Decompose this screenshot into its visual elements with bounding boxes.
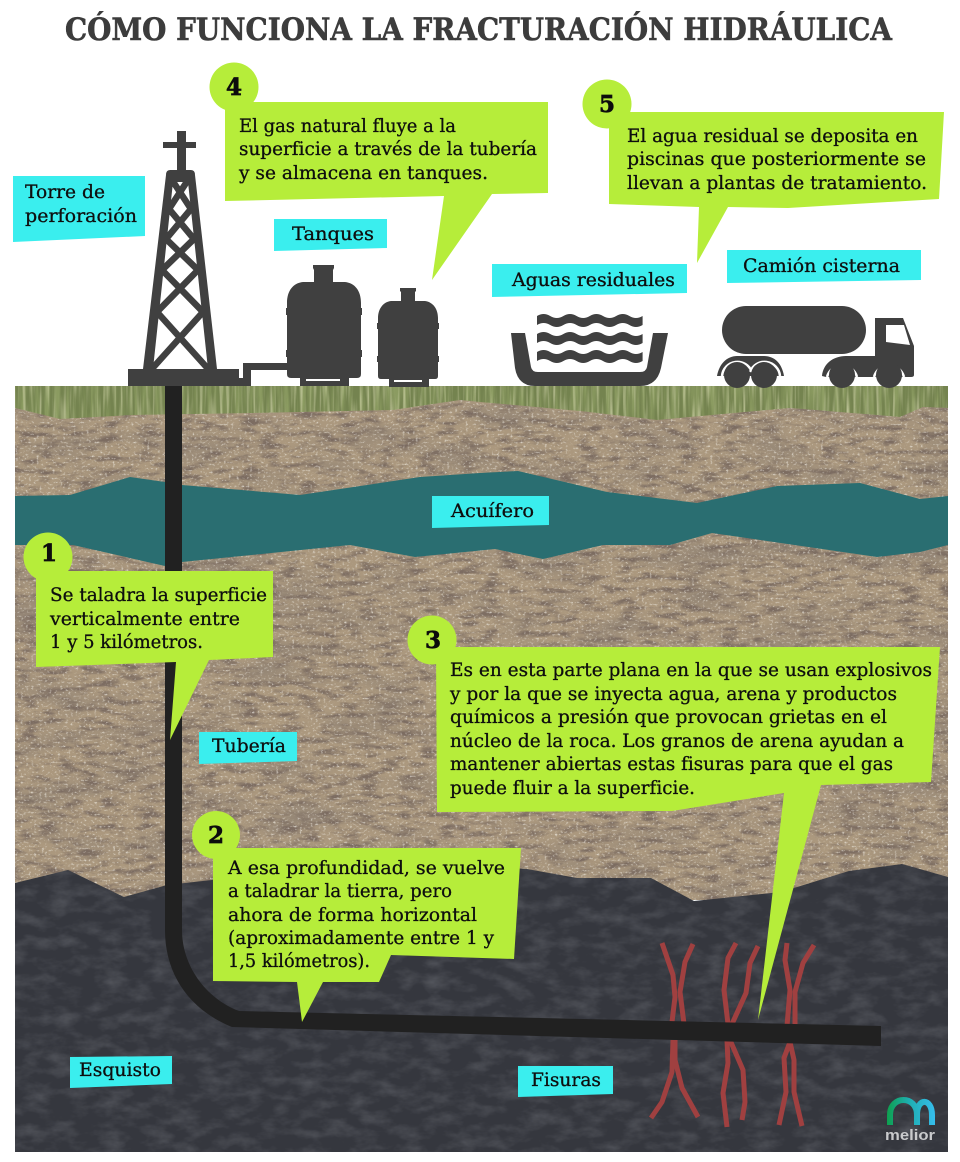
callout 5: 5 xyxy=(599,91,615,118)
callout 1: 1 xyxy=(41,540,57,567)
callout 3: núcleo de la roca. Los granos de arena ayudan a xyxy=(450,730,904,752)
label: shale xyxy=(70,1056,172,1088)
callout 4: y se almacena en tanques. xyxy=(238,162,488,184)
callout 2: A esa profundidad, se vuelve xyxy=(227,857,505,879)
label: tanks: Tanques xyxy=(292,223,374,245)
callout 2: 1,5 kilómetros). xyxy=(228,950,370,972)
panel: underground cross-section xyxy=(15,386,948,1152)
callout 3: químicos a presión que provocan grietas en el xyxy=(450,706,887,728)
callout 3: puede fluir a la superficie. xyxy=(450,777,695,799)
label: drilling tower: perforación xyxy=(25,205,137,227)
drill pipe xyxy=(165,386,881,1046)
icon: small tank xyxy=(377,288,439,387)
label: pipe xyxy=(199,732,297,764)
callout 5: piscinas que posteriormente se xyxy=(627,148,926,170)
callout 1: verticalmente entre xyxy=(49,608,240,630)
label: aquifer xyxy=(432,496,549,528)
label: fissures xyxy=(518,1066,613,1097)
fissures xyxy=(651,943,814,1127)
callout 1: 1 y 5 kilómetros. xyxy=(50,631,203,653)
shale layer xyxy=(15,860,948,1152)
label: drilling tower xyxy=(13,176,145,242)
callout 4: El gas natural fluye a la xyxy=(239,115,456,137)
callout 2: 2 xyxy=(208,822,224,849)
callout 5: llevan a plantas de tratamiento. xyxy=(627,172,927,194)
callout 3: 3 xyxy=(425,627,441,654)
icon: wastewater pool xyxy=(511,314,668,386)
label: tanker truck xyxy=(727,250,921,283)
icon: drilling tower xyxy=(128,131,239,386)
callout 4: 4 xyxy=(226,74,242,101)
callout 1 xyxy=(24,532,273,740)
grass layer xyxy=(15,386,948,420)
callout 5 xyxy=(582,80,944,263)
label: drilling tower: Torre de xyxy=(25,181,105,203)
callout 5: El agua residual se deposita en xyxy=(627,125,918,147)
icon: tanker truck xyxy=(717,306,914,388)
label: wastewater: Aguas residuales xyxy=(511,269,675,291)
label: aquifer: Acuífero xyxy=(450,500,534,522)
label: tanker truck: Camión cisterna xyxy=(743,255,900,277)
callout 4 xyxy=(210,62,548,280)
label: tanks xyxy=(274,219,387,251)
label: shale: Esquisto xyxy=(79,1059,161,1081)
callout 3: Es en esta parte plana en la que se usan explosivos xyxy=(450,659,932,681)
label: pipe: Tubería xyxy=(212,735,286,757)
callout 2: ahora de forma horizontal xyxy=(228,904,477,926)
callout 4: superficie a través de la tubería xyxy=(239,138,537,160)
label: fissures: Fisuras xyxy=(531,1069,601,1091)
title: CÓMO FUNCIONA LA FRACTURACIÓN HIDRÁULICA xyxy=(65,10,893,48)
callout 2 xyxy=(192,811,521,1022)
soil layer xyxy=(15,396,948,906)
callout 3 xyxy=(408,616,940,1020)
callout 3: mantener abiertas estas fisuras para que el gas xyxy=(450,753,893,775)
callout 2: a taladrar la tierra, pero xyxy=(228,880,452,902)
label: wastewater xyxy=(492,264,687,297)
icon: large tank xyxy=(286,265,362,386)
callout 3: y por la que se inyecta agua, arena y productos xyxy=(449,683,897,705)
logo: melior xyxy=(885,1100,935,1144)
aquifer band xyxy=(15,471,948,566)
callout 2: (aproximadamente entre 1 y xyxy=(228,927,494,949)
connector pipe xyxy=(239,363,288,386)
logo: melior: melior xyxy=(885,1127,935,1144)
callout 1: Se taladra la superficie xyxy=(50,584,267,606)
